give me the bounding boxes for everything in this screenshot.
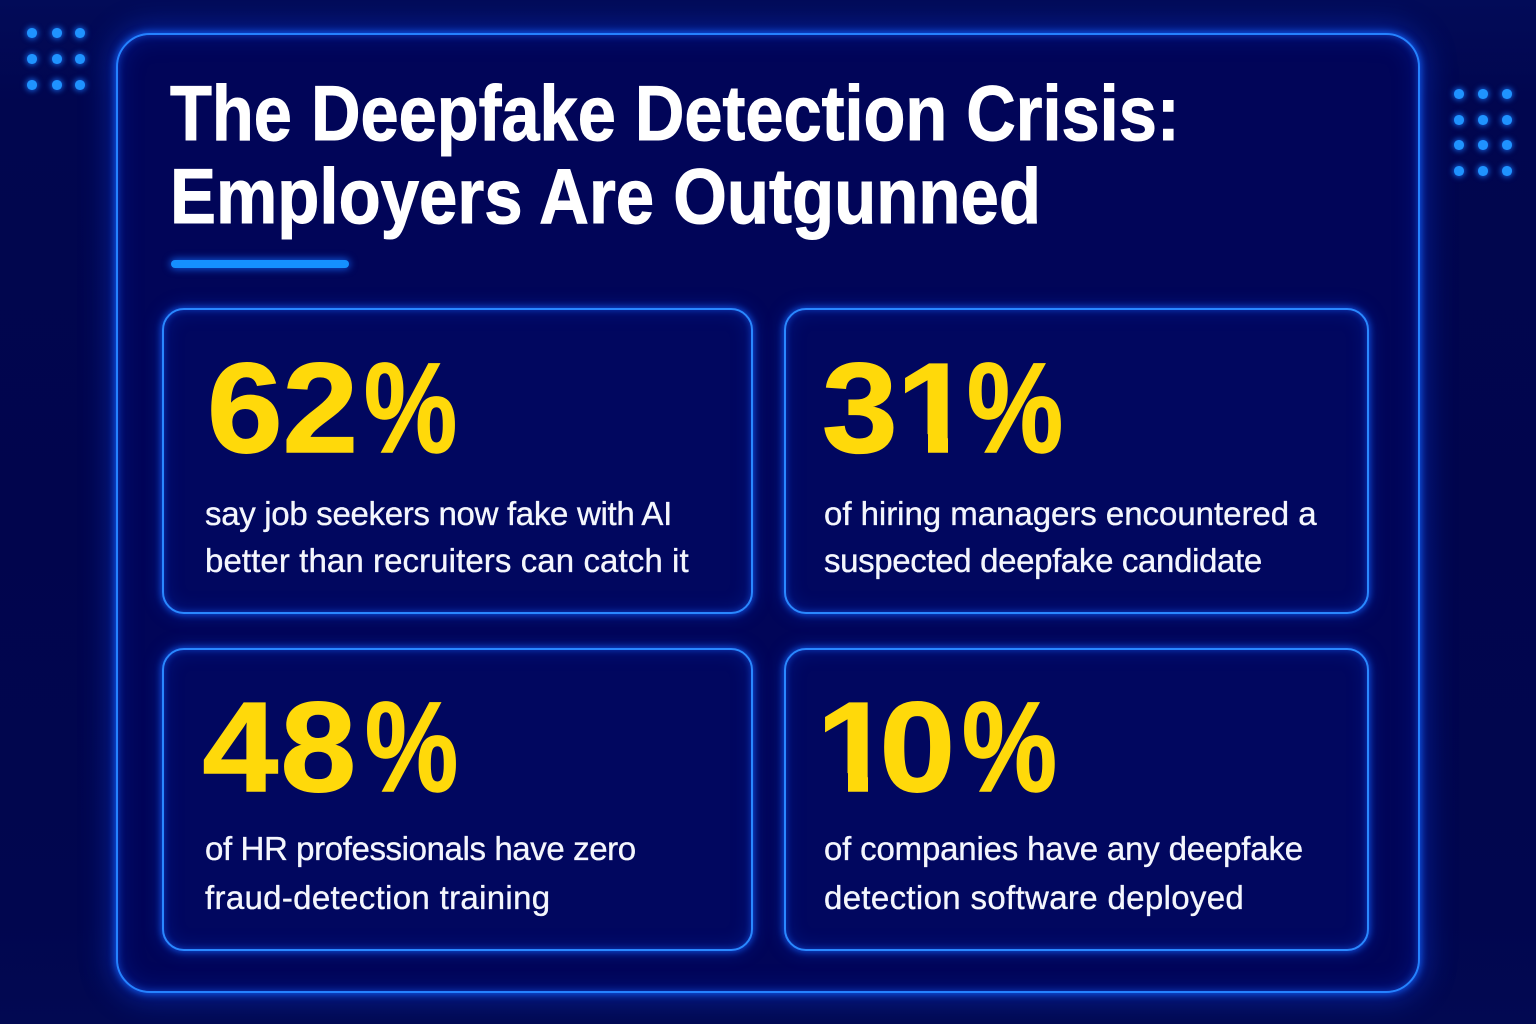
- number: 10%: 1: [816, 675, 892, 818]
- number: 62%: 2: [282, 336, 358, 479]
- number: 31%: %: [967, 336, 1063, 479]
- number: 10%: 0: [880, 675, 955, 818]
- description: 10%: detection software deployed: [824, 879, 1244, 916]
- description: 48%: fraud-detection training: [205, 879, 550, 916]
- panel: 10% stat: [784, 648, 1369, 951]
- description: 62%: better than recruiters can catch it: [205, 542, 689, 579]
- number: 10%: %: [962, 675, 1057, 818]
- number: 31%: 1: [896, 336, 972, 479]
- panel: 62% stat: [162, 308, 753, 614]
- number: 31%: [822, 336, 1063, 479]
- number: 10%: [825, 675, 1057, 818]
- description: 10%: of companies have any deepfake: [824, 830, 1303, 867]
- title: [170, 69, 1179, 240]
- number: 62%: 6: [207, 336, 283, 479]
- description: 62%: [205, 495, 689, 579]
- description: 31%: [824, 495, 1317, 580]
- decorative dots: top left: [22, 24, 90, 95]
- panel: 48% stat: [162, 648, 753, 951]
- number: 31%: 3: [822, 336, 898, 479]
- description: 62%: say job seekers now fake with AI: [205, 495, 672, 532]
- number: 48%: 4: [202, 675, 278, 818]
- decorative dots: top right: [1449, 84, 1516, 181]
- number: 62%: %: [364, 336, 458, 479]
- panel: 31% stat: [784, 308, 1369, 614]
- description: 10%: [824, 830, 1303, 916]
- number: 48%: 8: [280, 675, 356, 818]
- number: 48%: [202, 675, 458, 818]
- number: 48%: %: [365, 675, 458, 818]
- title: The Deepfake Detection Crisis:: [170, 69, 1179, 157]
- title: Employers Are Outgunned: [170, 152, 1040, 240]
- description: 48%: of HR professionals have zero: [205, 830, 636, 867]
- number: 62%: [207, 336, 458, 479]
- description: 48%: [205, 830, 636, 916]
- main panel: [116, 33, 1420, 993]
- description: 31%: of hiring managers encountered a: [824, 495, 1317, 532]
- title underline: [171, 260, 349, 268]
- description: 31%: suspected deepfake candidate: [824, 542, 1262, 579]
